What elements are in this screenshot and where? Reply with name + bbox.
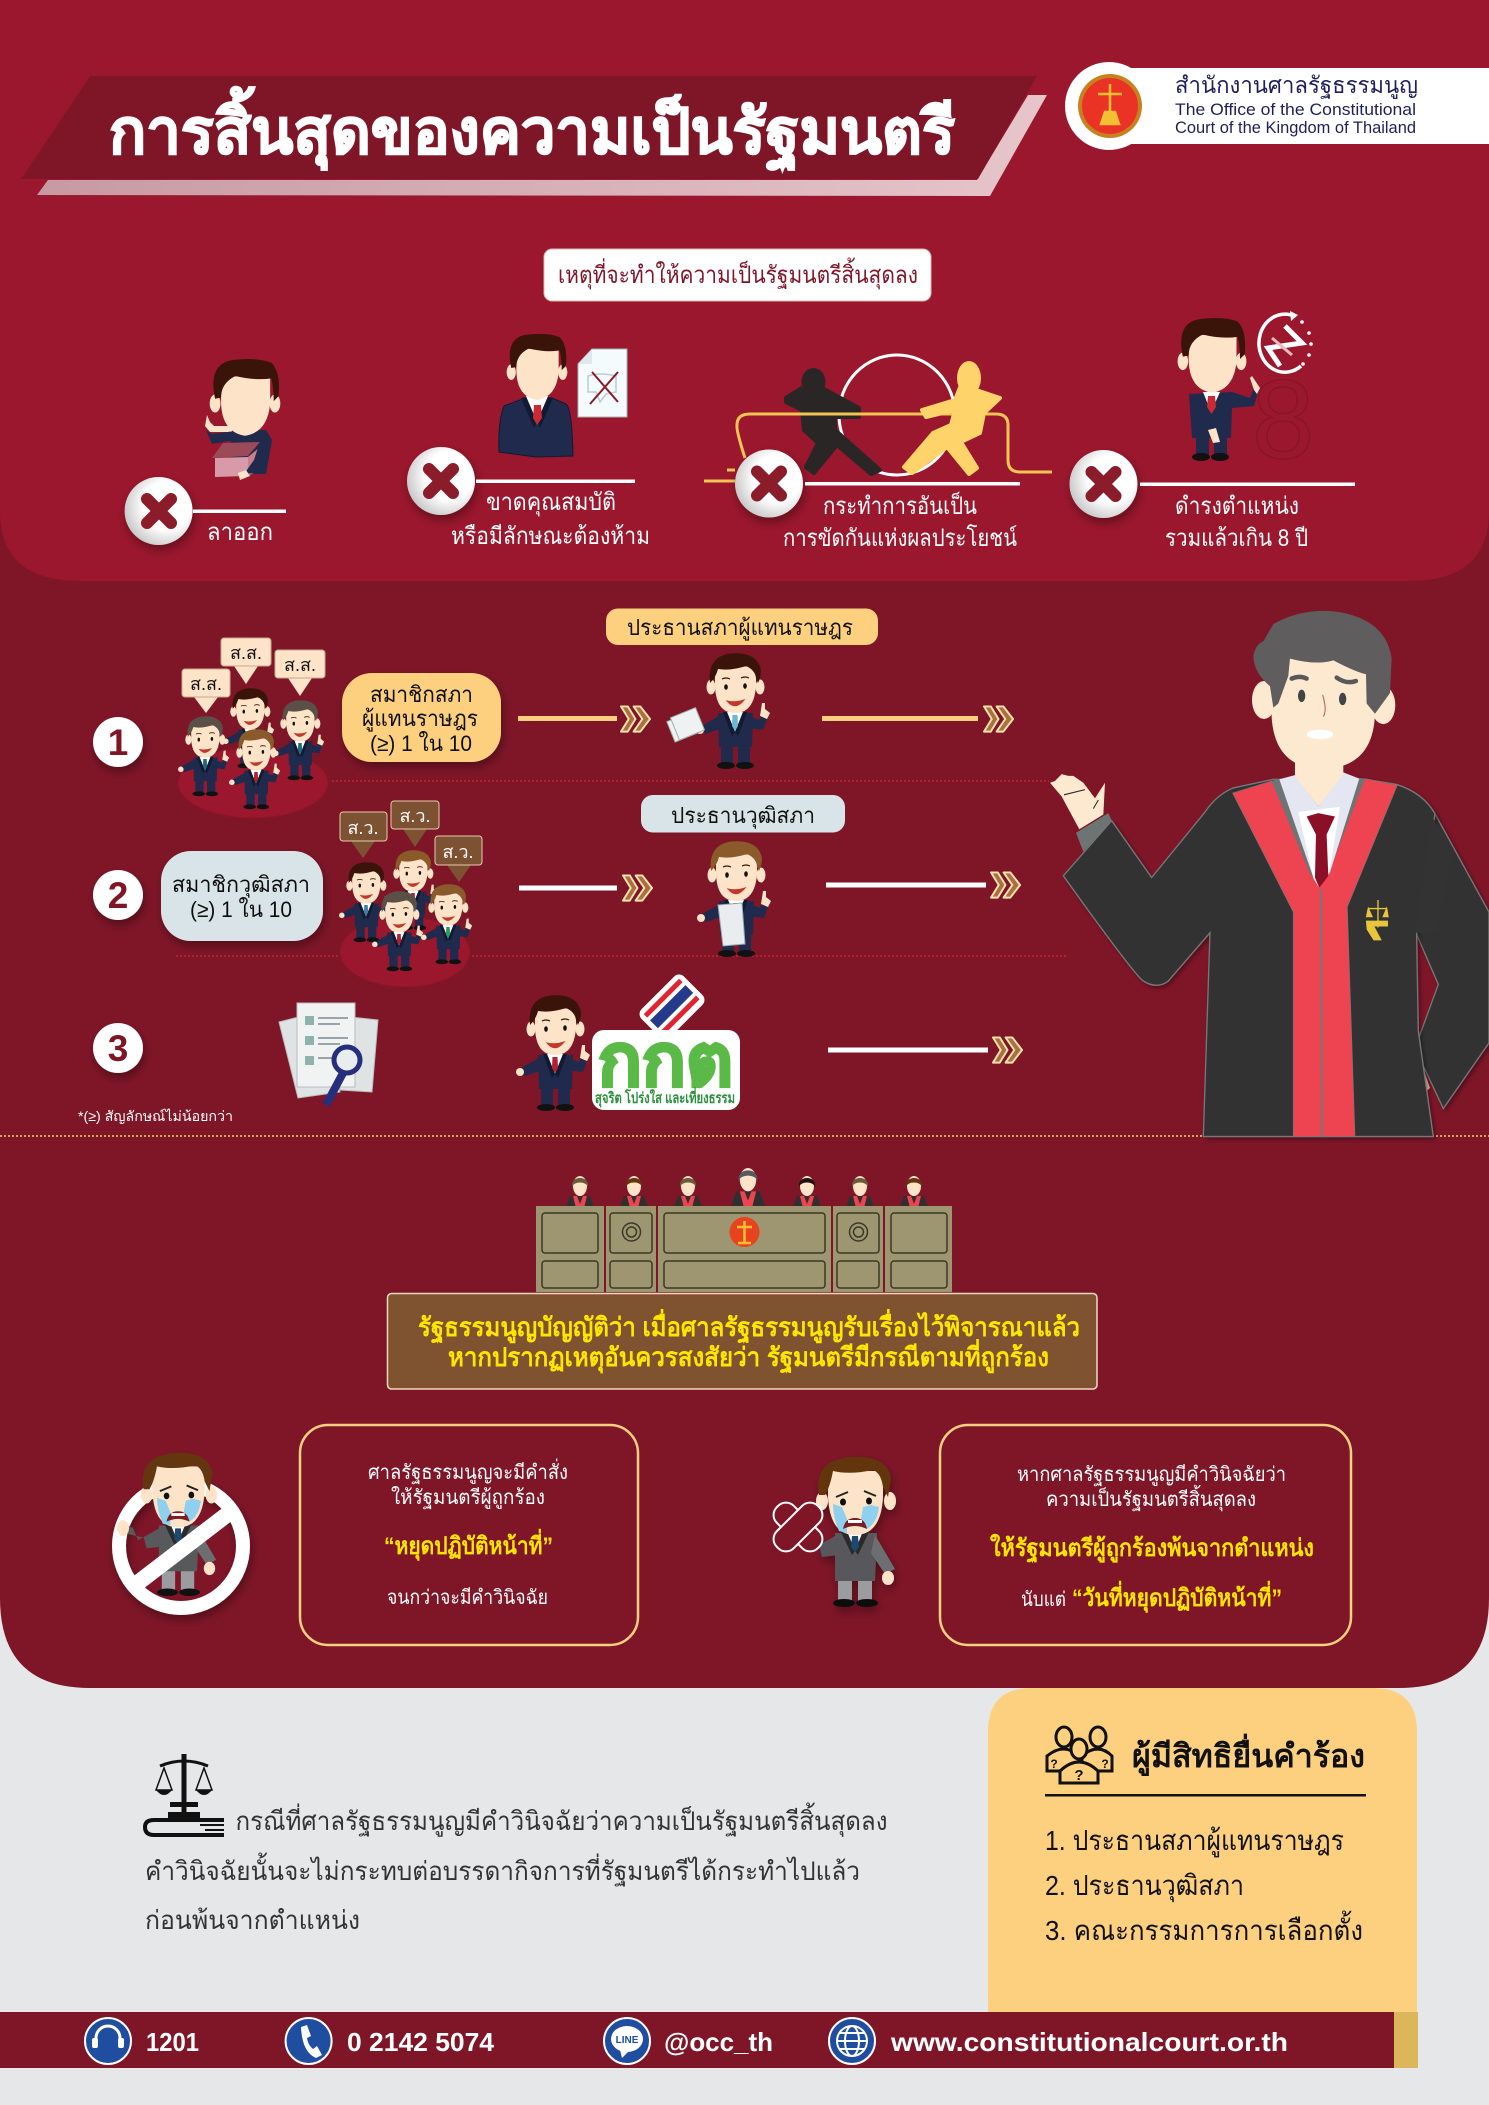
list of petitioners: 1. ประธานสภาผู้แทนราษฎร: [1045, 1825, 1344, 1858]
label pill: House speaker: [606, 608, 878, 645]
contact: hotline: 1201: [146, 2027, 199, 2057]
label: lack of qualifications: ขาดคุณสมบัติ: [486, 489, 616, 517]
speech bubbles: MP: ส.ส.: [230, 643, 262, 663]
judge figure: [1050, 611, 1489, 1137]
footnote: *(≥) สัญลักษณ์ไม่น้อยกว่า: [78, 1108, 233, 1124]
speech bubbles: MP: ส.ส.: [284, 655, 316, 675]
icon: group of senators: [339, 850, 472, 987]
label: conflict of interest: การขัดกันแห่งผลประโยชน์: [783, 524, 1017, 552]
hand: [1050, 774, 1105, 829]
icon: documents with magnifier: [279, 1003, 378, 1105]
mouth: [1307, 730, 1333, 739]
panel: termination ruling: ความเป็นรัฐมนตรีสิ้นสุดลง: [1046, 1485, 1256, 1512]
label: over 8 years: ดำรงตำแหน่ง: [1175, 493, 1299, 520]
icon: tug of war: [704, 355, 1052, 481]
title banner: การสิ้นสุดของความเป็นรัฐมนตรี: [109, 86, 955, 172]
panel: suspension order: จนกว่าจะมีคำวินิจฉัย: [387, 1587, 548, 1609]
icon: Senate president with document: [697, 841, 771, 957]
arrow: [822, 706, 1013, 732]
contact: phone: 0 2142 5074: [347, 2027, 495, 2057]
icon: x mark: [1070, 450, 1138, 518]
label: over 8 years: รวมแล้วเกิน 8 ปี: [1165, 525, 1308, 552]
label: over 8 years: [1165, 493, 1308, 552]
footer bar: [0, 2012, 1418, 2068]
red stripes: [1233, 779, 1397, 1137]
ears: [1252, 681, 1276, 719]
neck: [1295, 757, 1343, 807]
sleeve seam cover: [1415, 818, 1453, 933]
label: conflict of interest: [783, 491, 1017, 552]
icon: House speaker with document: [667, 653, 770, 769]
speech bubbles: MP: [182, 638, 325, 713]
logo: Election Commission: สุจริต โปร่งใส และเที่ยงธรรม: [595, 1087, 735, 1108]
judges row: [564, 1168, 930, 1212]
speech bubbles: senator: ส.ว.: [399, 806, 431, 826]
label: resign: ลาออก: [207, 519, 273, 546]
contact: LINE: LINE: [616, 2035, 639, 2046]
label pill: Senate president: [641, 795, 845, 832]
title banner: [21, 76, 1047, 196]
court bench with judges: [536, 1168, 952, 1292]
panel: suspension order: ให้รัฐมนตรีผู้ถูกร้อง: [391, 1486, 545, 1510]
icon: x mark: [407, 447, 475, 515]
icon: crying minister with x mark: [769, 1457, 896, 1607]
icon: group of MPs: [178, 688, 328, 818]
heading: causes label: [544, 249, 931, 301]
number 1: 1: [108, 722, 128, 763]
icon: man, clock and number 8: [1178, 311, 1314, 482]
label pill: House members: (≥) 1 ใน 10: [370, 731, 472, 756]
contact: phone: [286, 2018, 495, 2064]
row 3: Election Commission route: [78, 972, 1022, 1124]
icon: crying minister with prohibition sign: [117, 1453, 243, 1608]
face: [1272, 645, 1375, 769]
number 3: 3: [108, 1028, 128, 1069]
label pill: senators: (≥) 1 ใน 10: [190, 897, 292, 922]
icon: x mark: [735, 450, 803, 518]
panel: eligible petitioners: [988, 1688, 1417, 2020]
contact: LINE: @occ_th: [664, 2027, 773, 2057]
arrow: [518, 706, 650, 732]
gold emblem: [1367, 900, 1388, 940]
panel: suspension order: ศาลรัฐธรรมนูญจะมีคำสั่ง: [368, 1458, 568, 1485]
panel: termination ruling: [940, 1425, 1351, 1645]
heading: ผู้มีสิทธิยื่นคำร้อง: [1132, 1733, 1365, 1777]
label pill: senators: สมาชิกวุฒิสภา: [172, 872, 310, 898]
logo: Office of the Constitutional Court: The Office of the Constitutional: [1175, 100, 1416, 119]
panel: termination ruling: “วันที่หยุดปฏิบัติหน้าที่”: [1072, 1580, 1282, 1614]
sleeve cuff: [1076, 813, 1112, 852]
icon: man with rejected document: [499, 334, 627, 457]
logo: Office of the Constitutional Court: [1065, 62, 1489, 150]
cause 1: resignation: [125, 359, 286, 546]
cause 3: conflict of interest: [704, 355, 1052, 552]
icon: people with question marks: ?: [1101, 1757, 1109, 1771]
logo: Office of the Constitutional Court: Court of the Kingdom of Thailand: [1175, 118, 1416, 137]
callout: constitution provision: [388, 1294, 1097, 1389]
speech bubbles: senator: ส.ว.: [347, 818, 379, 838]
contact: hotline: [85, 2018, 199, 2064]
panel: suspension order: [300, 1425, 638, 1645]
eyes and brows: [1292, 677, 1356, 682]
hidden hand: [1422, 1064, 1430, 1091]
logo: Election Commission: กกต: [598, 1021, 733, 1101]
icon: people with question marks: ?: [1050, 1757, 1058, 1771]
icon: scales on book: [145, 1754, 224, 1835]
label pill: senators: [161, 851, 323, 941]
label: lack of qualifications: [451, 489, 650, 550]
speech bubbles: MP: ส.ส.: [190, 674, 222, 694]
grey collar: [1272, 778, 1365, 881]
icon: man with box: [205, 359, 280, 480]
divider dotted lines: [176, 781, 1068, 956]
palm lines: [1064, 790, 1098, 809]
panel: suspension order: “หยุดปฏิบัติหน้าที่”: [384, 1528, 553, 1562]
row 1: House of Representatives route: [93, 608, 1013, 818]
logo: Election Commission: [592, 972, 740, 1110]
icon: people with question marks: [1047, 1727, 1112, 1784]
panel: termination ruling: นับแต่: [1021, 1589, 1066, 1611]
icon: Election Commission officer: [516, 995, 590, 1111]
icon: man, clock and number 8: 8: [1252, 357, 1314, 482]
logo: Office of the Constitutional Court: สำนักงานศาลรัฐธรรมนูญ: [1175, 72, 1418, 99]
panel: termination ruling: หากศาลรัฐธรรมนูญมีคำวินิจฉัยว่า: [1017, 1464, 1286, 1487]
robe: [1063, 779, 1435, 1137]
label pill: House members: [342, 673, 501, 762]
label: conflict of interest: กระทำการอันเป็น: [823, 491, 977, 520]
list of petitioners: 3. คณะกรรมการการเลือกตั้ง: [1045, 1910, 1363, 1946]
text block: ruling note: ก่อนพ้นจากตำแหน่ง: [145, 1905, 360, 1935]
cause 2: lack of qualifications: [407, 334, 650, 550]
right sleeve: [1407, 814, 1489, 1109]
label pill: House members: ผู้แทนราษฎร: [362, 706, 478, 732]
nose: [1323, 695, 1325, 717]
label pill: House speaker: ประธานสภาผู้แทนราษฎร: [627, 615, 853, 641]
callout: constitution provision: รัฐธรรมนูญบัญญัติว่า เมื่อศาลรัฐธรรมนูญรับเรื่องไว้พิจารณาแล้ว: [418, 1308, 1080, 1345]
tie: [1307, 813, 1335, 888]
speech bubbles: senator: ส.ว.: [442, 842, 474, 862]
arrow: [828, 1037, 1022, 1063]
label pill: Senate president: ประธานวุฒิสภา: [671, 803, 815, 829]
list of petitioners: 2. ประธานวุฒิสภา: [1045, 1870, 1244, 1903]
number 2: [93, 870, 143, 920]
arrow: [826, 872, 1020, 898]
heading: causes label: เหตุที่จะทำให้ความเป็นรัฐมนตรีสิ้นสุดลง: [558, 257, 918, 290]
arrow: [519, 875, 652, 901]
row 2: Senate route: [93, 795, 1020, 987]
callout: constitution provision: หากปรากฏเหตุอันควรสงสัยว่า รัฐมนตรีมีกรณีตามที่ถูกร้อง: [448, 1338, 1049, 1375]
icon: people with question marks: ?: [1074, 1767, 1084, 1784]
label pill: House members: สมาชิกสภา: [370, 682, 473, 707]
speech bubbles: senator: [340, 801, 482, 882]
panel: top red background: [0, 0, 1489, 581]
text block: ruling note: กรณีที่ศาลรัฐธรรมนูญมีคำวินิจฉัยว่าความเป็นรัฐมนตรีสิ้นสุดลง: [236, 1802, 888, 1837]
gold dotted divider: [0, 1135, 1489, 1137]
text block: ruling note: คำวินิจฉัยนั้นจะไม่กระทบต่อบรรดากิจการที่รัฐมนตรีได้กระทำไปแล้ว: [145, 1852, 860, 1887]
contact: LINE: [604, 2018, 773, 2064]
contact: website: [829, 2018, 1288, 2064]
icon: x mark: [125, 477, 193, 545]
number 2: 2: [108, 875, 128, 916]
contact: website: www.constitutionalcourt.or.th: [890, 2027, 1288, 2057]
list of petitioners: [1045, 1825, 1363, 1946]
panel: termination ruling: ให้รัฐมนตรีผู้ถูกร้องพ้นจากตำแหน่ง: [990, 1533, 1314, 1564]
cause 4: over 8 years: [1070, 311, 1355, 552]
text block: ruling note: [145, 1802, 888, 1935]
hair: [1253, 611, 1392, 714]
desk: [536, 1206, 952, 1292]
number 1: [93, 717, 143, 767]
shirt: [1279, 772, 1359, 888]
label: lack of qualifications: หรือมีลักษณะต้องห้าม: [451, 523, 650, 550]
number 3: [93, 1023, 143, 1073]
